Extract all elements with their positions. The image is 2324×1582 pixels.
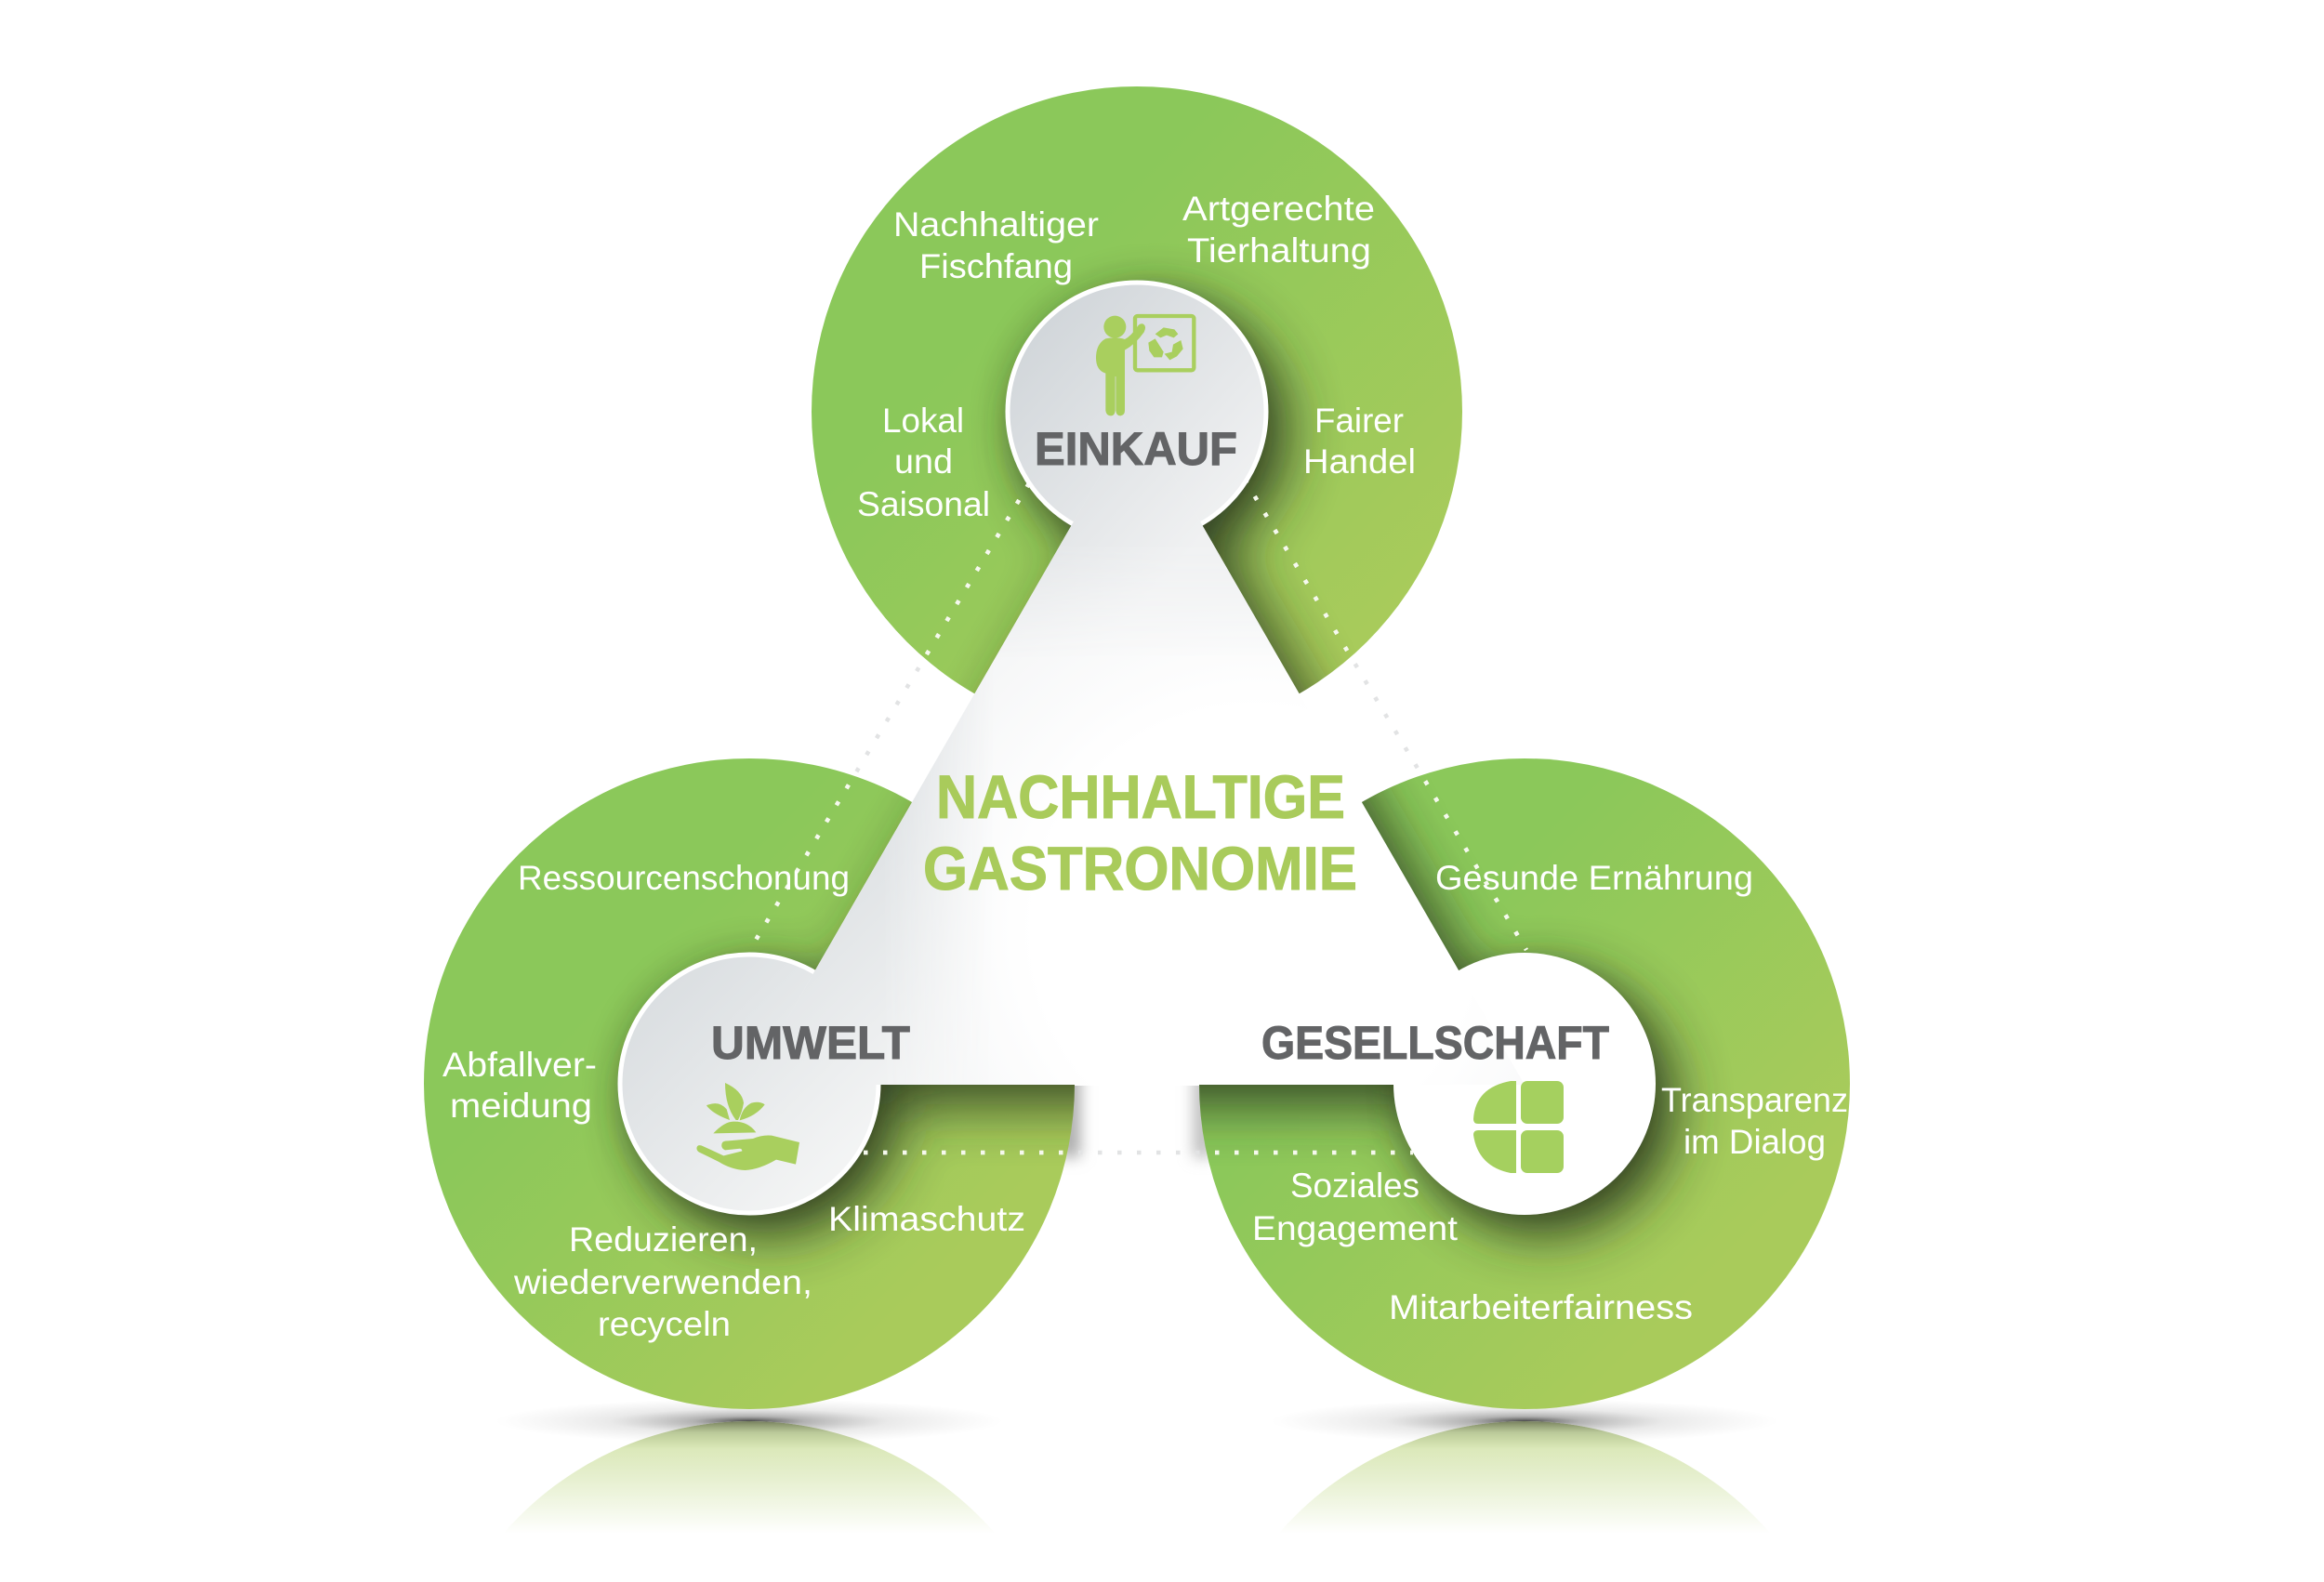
arm tip shadows [1064,1086,1208,1166]
label: Soziales Engagement [1252,1167,1459,1247]
title: GASTRONOMIE [923,834,1357,903]
title [923,762,1357,903]
floor shadows [495,1399,1778,1444]
label: Nachhaltiger Fischfang [893,205,1099,285]
label: Soziales Engagement: Engagement [1252,1209,1459,1247]
label: Abfallvermeidung [442,1046,597,1125]
label: Artgerechte Tierhaltung [1182,190,1375,270]
label: Reduzieren, wiederverwenden, recyceln: recyceln [598,1305,731,1343]
disc: Einkauf [1008,283,1266,541]
label: Gesunde Ernährung: Gesunde Ernährung [1435,859,1753,897]
label: Transparenz im Dialog: Transparenz [1661,1081,1848,1119]
label: Lokal und Saisonal: Saisonal [857,485,990,523]
circle: Gesellschaft [1199,758,1850,1409]
label: Soziales Engagement: Soziales [1290,1167,1419,1205]
label: Abfallvermeidung: meidung [450,1087,592,1125]
label: Lokal und Saisonal: und [894,442,953,481]
label: Artgerechte Tierhaltung: Tierhaltung [1187,231,1371,270]
label: Transparenz im Dialog: im Dialog [1684,1123,1826,1161]
label: Fairer Handel: Handel [1303,442,1416,481]
icon: teacher at recycling board [1096,316,1194,415]
label: Lokal und Saisonal: Lokal [882,402,964,440]
label: Fairer Handel [1303,402,1416,481]
icon: hand holding plant [696,1083,799,1170]
label: Reduzieren, wiederverwenden, recyceln: wiederverwenden, [513,1263,812,1301]
heading: Gesellschaft: GESELLSCHAFT [1261,1017,1609,1069]
reflection: right circle [1278,1421,1771,1534]
circle: Umwelt [424,758,1075,1409]
label: Nachhaltiger Fischfang: Fischfang [919,247,1073,285]
label: Abfallvermeidung: Abfallver- [442,1046,597,1084]
reflection: left circle [503,1421,996,1534]
label: Nachhaltiger Fischfang: Nachhaltiger [893,205,1099,244]
dotted lines on circles [749,480,1526,1153]
label: Klimaschutz: Klimaschutz [828,1200,1025,1238]
disc: Gesellschaft [1393,953,1656,1215]
label: Artgerechte Tierhaltung: Artgerechte [1182,190,1375,228]
label: Ressourcenschonung: Ressourcenschonung [518,859,850,897]
label: Transparenz im Dialog [1661,1081,1848,1161]
label: Reduzieren, wiederverwenden, recyceln [513,1220,812,1343]
heading: Einkauf: EINKAUF [1035,423,1237,475]
disc: Umwelt [620,955,878,1213]
label: Mitarbeiterfairness: Mitarbeiterfairness [1389,1288,1693,1326]
label: Fairer Handel: Fairer [1314,402,1404,440]
label: Reduzieren, wiederverwenden, recyceln: Reduzieren, [569,1220,758,1259]
label: Lokal und Saisonal [857,402,990,523]
heading: Umwelt: UMWELT [711,1017,910,1069]
icon: four-leaf tiles [1473,1081,1564,1173]
circle: Einkauf [812,86,1462,737]
title: NACHHALTIGE [936,762,1345,831]
central triangle [812,522,1459,1085]
inner drop shadow on circles [619,288,1675,1234]
dotted lines outside circles [749,480,1526,1153]
